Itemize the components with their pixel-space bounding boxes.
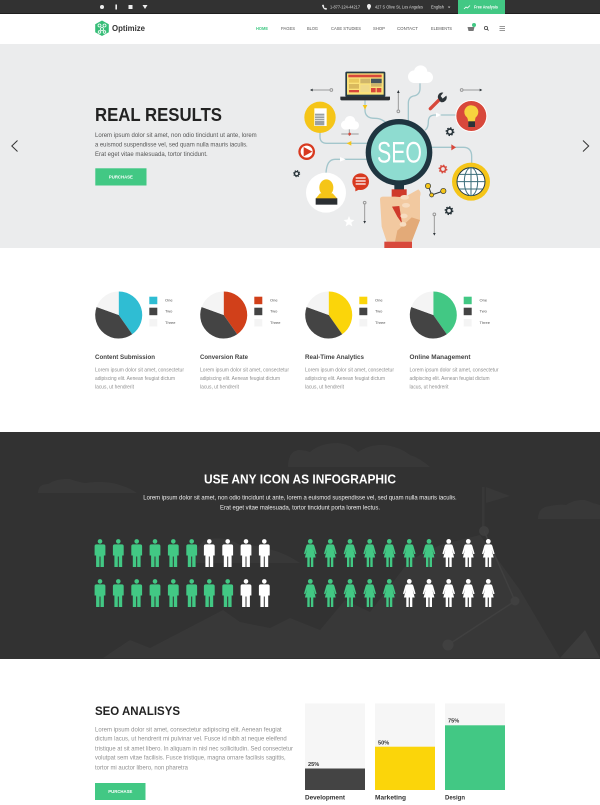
panel: SEO analysis [95,704,505,802]
pie chart [200,292,247,339]
button: free analysis: Free Analysis [474,5,499,10]
phone number: 1-877-124-44217 [330,5,360,10]
icon: social links [100,4,148,10]
icon: hamburger menu [500,26,505,30]
legend: One [165,298,173,302]
menu items [256,26,452,31]
icon: phone [322,5,327,10]
women pictogram row 2 [304,579,495,607]
description: adipiscing elit. Aenean feugiat dictum [95,376,175,382]
legend: Two [165,308,173,314]
section text: Erat eget vitae malesuada, tortor tincidunt porta lorem lectus. [220,504,380,511]
description: Lorem ipsum dolor sit amet, consectetur [410,368,499,374]
section text: Lorem ipsum dolor sit amet, non odio tincidunt ut ante, lorem a euismod suspendisse vel, sed quam nulla mauris iaculis. [143,495,457,502]
bar: marketing: Marketing [375,794,406,802]
legend: Two [270,308,278,314]
hero text: a euismod suspendisse vel, sed quam nulla mauris iaculis. [95,142,248,149]
legend: Three [270,320,281,325]
legend [359,297,386,326]
pie panel: online management [410,292,499,390]
icon: search [484,26,489,31]
laptop [340,72,390,100]
heading: Online Management [410,354,471,361]
legend [464,297,491,326]
heading: Real-Time Analytics [305,354,364,361]
button [95,783,146,800]
description: adipiscing elit. Aenean feugiat dictum [305,376,385,382]
panel: dark infographic section [0,432,600,659]
bar: development: 25% [308,762,319,768]
icon: previous arrow [12,140,18,152]
description: adipiscing elit. Aenean feugiat dictum [410,376,490,382]
bar: marketing: 50% [378,740,389,746]
description: lacus, ut hendrerit [200,384,239,390]
icon: star [344,216,354,226]
paragraph: tristique at sit amet libero. In aliquam in nisl nec sollicitudin. Sed consectetur [95,745,293,752]
navigation bar [0,14,600,44]
pie chart [305,292,352,339]
icon: play button [298,143,315,160]
pie panel: real-time analytics [305,292,394,390]
menu items: CASE STUDIES [331,26,361,31]
section heading: USE ANY ICON AS INFOGRAPHIC [204,472,396,486]
icon: small cloud [341,116,359,136]
hero panel [0,44,600,250]
paragraph [95,726,293,771]
description [410,368,499,390]
hero heading: REAL RESULTS [95,104,222,125]
description [200,368,289,390]
menu items: HOME [256,26,268,31]
legend: One [375,298,383,302]
description [95,368,184,390]
legend: Two [480,308,488,314]
legend: Three [165,320,176,325]
logo [95,20,145,36]
menu items: BLOG [307,26,319,31]
hero button [95,168,146,186]
button: PURCHASE [108,789,132,794]
icon: node graph [425,183,446,197]
language selector: English [431,5,444,10]
pie chart [95,292,142,339]
logo: Optimize [112,23,145,33]
bar: design: Design [445,794,465,802]
legend [254,297,281,326]
hand holding handle [380,189,421,250]
pie panel: conversion rate [200,292,289,390]
menu items: ELEMENTS [431,26,452,31]
legend: Three [375,320,386,325]
description: Lorem ipsum dolor sit amet, consectetur [305,368,394,374]
icon: next arrow [583,140,589,152]
hero text: Lorem ipsum dolor sit amet, non odio tincidunt ut ante, lorem [95,132,257,139]
hero button: PURCHASE [109,175,133,180]
description: adipiscing elit. Aenean feugiat dictum [200,376,280,382]
legend: Three [480,320,491,325]
legend: One [270,298,278,302]
icon: user avatar [306,173,346,213]
description: Lorem ipsum dolor sit amet, consectetur [200,368,289,374]
icon: document [304,102,336,133]
SEO illustration [294,65,490,250]
paragraph: volutpat sem vitae facilisis. Fusce tristique, magna ornare facilisis sagittis, [95,755,286,762]
description: lacus, ut hendrerit [95,384,134,390]
magnifying glass [366,119,432,191]
connector lines [320,83,472,173]
legend [149,297,176,326]
bar: development [305,704,365,802]
bar: marketing [375,704,435,802]
icon: map pin [367,4,371,10]
hero text: Erat eget vitae malesuada, tortor tincidunt. [95,151,208,158]
small indicators [312,89,480,233]
icon: cart [468,23,476,31]
icon: globe [452,163,490,201]
icon: caret [448,7,450,8]
legend: One [480,298,488,302]
pie chart [410,292,457,339]
magnifying glass: SEO [377,136,422,169]
top bar [0,0,600,14]
heading: SEO ANALISYS [95,704,180,718]
paragraph: Lorem ipsum dolor sit amet, consectetur adipiscing elit. Aenean feugiat [95,726,282,733]
menu items: PAGES [281,26,295,31]
button: free analysis [458,0,505,14]
heading: Conversion Rate [200,354,248,361]
legend: Two [375,308,383,314]
icon: wrench [430,93,447,109]
paragraph: tortor mi auctor libero, non pharetra [95,764,189,771]
arrows on lines [347,105,367,146]
icon: gears [294,128,454,214]
bar: design [445,704,505,802]
women pictogram row 1 [304,539,495,567]
icon: chat bubble [352,173,369,191]
background clouds and mountains [38,443,600,658]
heading: Content Submission [95,354,155,361]
menu items: CONTACT [397,26,418,31]
bar: development: Development [305,794,346,802]
description: lacus, ut hendrerit [305,384,344,390]
paragraph: dictum lacus, ut hendrerit mi pulvinar vel. Fusce id nibh at neque eleifend [95,736,287,743]
section text [143,495,457,511]
description: lacus, ut hendrerit [410,384,449,390]
men pictogram row 1 [95,539,270,567]
icon: light bulb [455,100,487,132]
address: 427 S Olive St, Los Angeles [375,5,424,10]
menu items: SHOP [373,26,385,31]
bar: design: 75% [448,719,459,725]
description: Lorem ipsum dolor sit amet, consectetur [95,368,184,374]
men pictogram row 2 [95,579,270,607]
icon: cloud [408,65,433,83]
description [305,368,394,390]
pie panel: content submission [95,292,184,390]
hero text [95,132,257,158]
